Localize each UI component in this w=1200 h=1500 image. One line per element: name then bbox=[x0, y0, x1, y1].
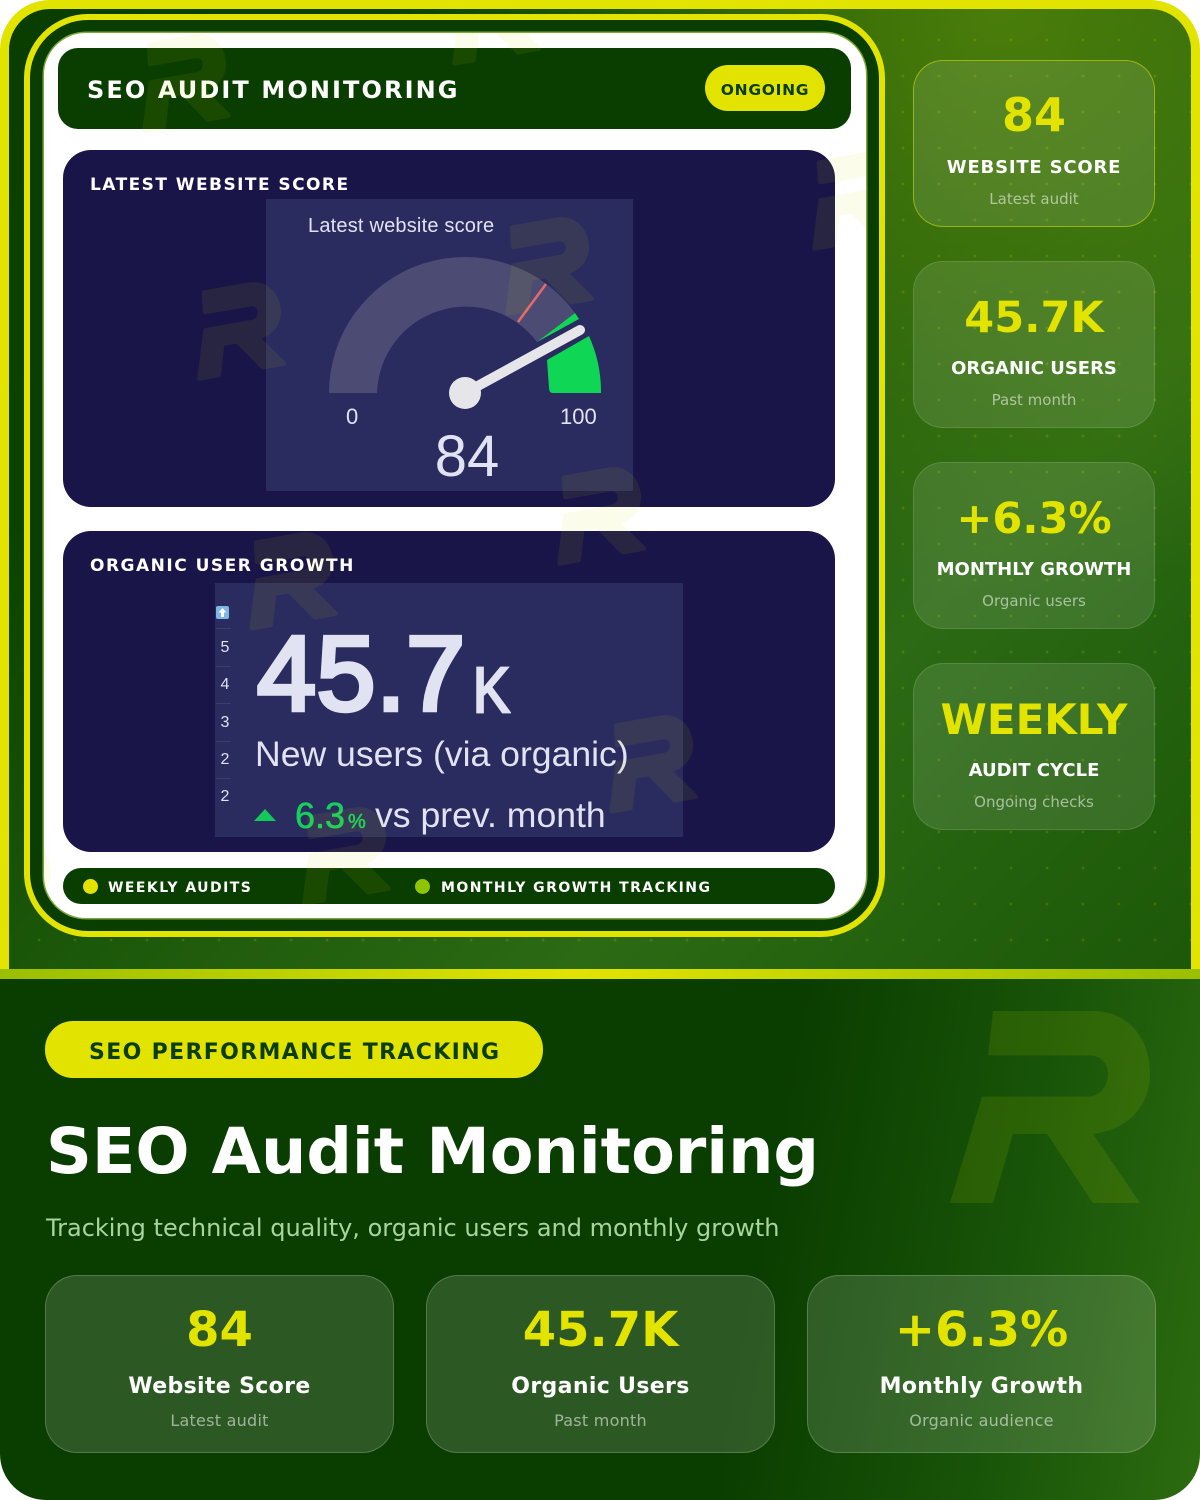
growth percent: 6.3% bbox=[295, 795, 366, 836]
stat card: organic users: Past month bbox=[992, 391, 1076, 409]
stat card: monthly growth: +6.3% bbox=[956, 494, 1112, 544]
gauge screenshot bbox=[266, 199, 633, 491]
stat card: organic users: 45.7K bbox=[964, 293, 1104, 343]
stat card: website score: 84 bbox=[1002, 88, 1066, 142]
stat card: monthly growth: MONTHLY GROWTH bbox=[937, 559, 1131, 580]
gauge maximum: 100 bbox=[560, 404, 597, 429]
white dashboard panel bbox=[44, 33, 866, 918]
new users caption: New users (via organic) bbox=[255, 734, 629, 774]
stat card: weekly audit cycle: Ongoing checks bbox=[974, 793, 1094, 811]
dot pattern bbox=[9, 9, 1191, 959]
gauge minimum: 0 bbox=[346, 404, 358, 429]
monthly dot bbox=[415, 879, 430, 894]
axis numbers: 2 bbox=[221, 751, 229, 768]
stat card: weekly audit cycle bbox=[913, 663, 1155, 830]
big user count: 45.7 bbox=[257, 615, 466, 733]
monthly label: MONTHLY GROWTH TRACKING bbox=[441, 880, 711, 896]
summary card: website score: Latest audit bbox=[170, 1411, 269, 1430]
axis numbers bbox=[216, 628, 231, 805]
panel: organic user growth bbox=[63, 531, 835, 852]
axis numbers: 2 bbox=[221, 788, 229, 805]
stat card: weekly audit cycle: WEEKLY bbox=[941, 695, 1127, 744]
stat card: website score bbox=[913, 60, 1155, 227]
panel: latest website score bbox=[63, 150, 835, 507]
axis numbers: 5 bbox=[221, 639, 229, 656]
stat card: website score: Latest audit bbox=[989, 190, 1079, 208]
section tag pill bbox=[45, 1021, 543, 1078]
axis numbers: 3 bbox=[221, 714, 229, 731]
thousands suffix: K bbox=[473, 654, 510, 726]
stat card: weekly audit cycle: AUDIT CYCLE bbox=[969, 760, 1099, 781]
top section background bbox=[0, 0, 1200, 969]
summary card: organic users: Past month bbox=[554, 1411, 647, 1430]
summary card: website score bbox=[45, 1275, 394, 1453]
gauge value: 84 bbox=[435, 424, 499, 489]
stat card: organic users: ORGANIC USERS bbox=[951, 358, 1117, 379]
summary card: organic users: 45.7K bbox=[523, 1302, 678, 1358]
header bar bbox=[58, 48, 851, 129]
stat card: organic users bbox=[913, 261, 1155, 428]
summary card: monthly growth: Organic audience bbox=[909, 1411, 1054, 1430]
ongoing badge: ONGOING bbox=[721, 81, 809, 99]
gauge chart bbox=[329, 257, 601, 409]
summary card: website score: Website Score bbox=[128, 1374, 311, 1399]
summary card: website score: 84 bbox=[186, 1302, 253, 1358]
monitoring frame bbox=[24, 14, 885, 937]
icon: up arrow bbox=[216, 606, 229, 619]
weekly dot bbox=[83, 879, 98, 894]
comparison caption: vs prev. month bbox=[375, 795, 606, 835]
axis numbers: 4 bbox=[221, 676, 229, 693]
icon: green triangle bbox=[254, 809, 276, 821]
bottom section background bbox=[0, 979, 1200, 1500]
stat card: monthly growth bbox=[913, 462, 1155, 629]
stat card: website score: WEBSITE SCORE bbox=[947, 157, 1121, 178]
summary card: monthly growth bbox=[807, 1275, 1156, 1453]
status bar bbox=[63, 868, 835, 904]
summary card: organic users bbox=[426, 1275, 775, 1453]
large logo watermark bbox=[950, 1011, 1150, 1203]
stat card: monthly growth: Organic users bbox=[982, 592, 1086, 610]
gauge caption: Latest website score bbox=[308, 215, 494, 237]
weekly label: WEEKLY AUDITS bbox=[108, 880, 252, 896]
summary card: monthly growth: +6.3% bbox=[895, 1302, 1068, 1358]
ongoing badge bbox=[705, 65, 825, 111]
growth screenshot bbox=[215, 583, 683, 837]
panel heading: ORGANIC USER GROWTH bbox=[90, 556, 355, 576]
subtitle: Tracking technical quality, organic users and monthly growth bbox=[46, 1214, 780, 1242]
panel heading: LATEST WEBSITE SCORE bbox=[90, 175, 350, 195]
main title: SEO Audit Monitoring bbox=[46, 1115, 819, 1189]
summary card: monthly growth: Monthly Growth bbox=[880, 1374, 1083, 1399]
section divider bbox=[0, 969, 1200, 979]
header title: SEO AUDIT MONITORING bbox=[87, 76, 460, 104]
summary card: organic users: Organic Users bbox=[511, 1374, 690, 1399]
section tag pill: SEO PERFORMANCE TRACKING bbox=[89, 1040, 500, 1065]
